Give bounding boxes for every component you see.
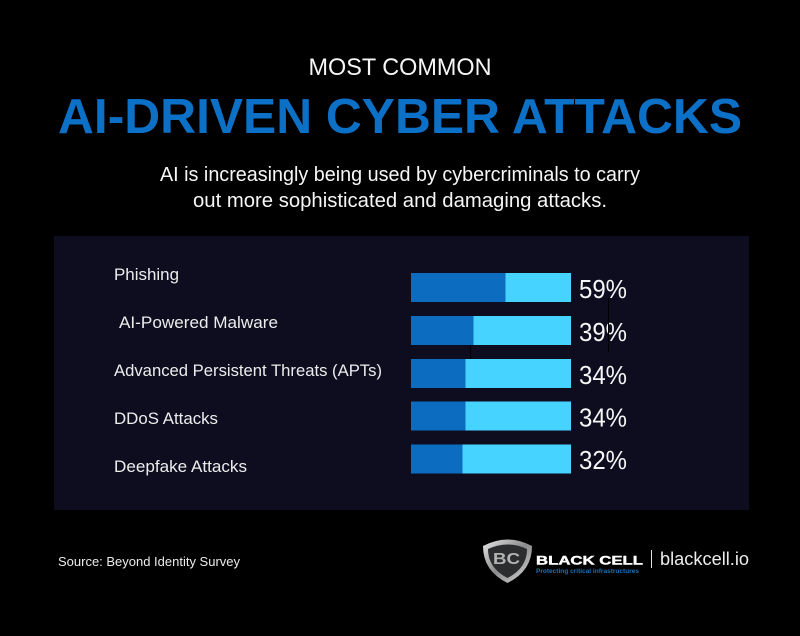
row: AI-Powered Malware: AI-Powered Malware bbox=[119, 314, 278, 332]
row: Advanced Persistent Threats: Advanced Persistent Threats (APTs) bbox=[114, 362, 382, 380]
row: AI-Powered Malware: 39% bbox=[579, 319, 627, 347]
logo: Black Cell bbox=[483, 540, 749, 583]
source note: Source: Beyond Identity Survey bbox=[58, 554, 240, 569]
intro text bbox=[160, 164, 640, 212]
logo: Black Cell: blackcell.io bbox=[660, 549, 749, 569]
row: DDoS Attacks: 34% bbox=[579, 404, 627, 432]
logo: Black Cell: Protecting critical infrastructures bbox=[536, 568, 639, 575]
row: DDoS Attacks: DDoS Attacks bbox=[114, 410, 218, 428]
row: AI-Powered Malware bbox=[119, 314, 627, 347]
icon: shield: BC bbox=[493, 551, 521, 568]
row: Phishing bbox=[114, 266, 627, 304]
row: Advanced Persistent Threats bbox=[114, 359, 627, 390]
icon: shield bbox=[483, 540, 532, 583]
subtitle: MOST COMMON bbox=[308, 54, 492, 81]
row: Deepfake Attacks: 32% bbox=[579, 447, 627, 475]
intro text: out more sophisticated and damaging attacks. bbox=[193, 190, 607, 212]
title: AI-DRIVEN CYBER ATTACKS bbox=[58, 90, 742, 144]
row: Advanced Persistent Threats: 34% bbox=[579, 362, 627, 390]
logo: Black Cell: BLACK CELL bbox=[536, 554, 643, 568]
intro text: AI is increasingly being used by cybercriminals to carry bbox=[160, 164, 640, 186]
row: Phishing: 59% bbox=[579, 276, 627, 304]
row: Deepfake Attacks: Deepfake Attacks bbox=[114, 458, 247, 476]
panel: bar chart bbox=[54, 236, 749, 510]
row: Phishing: Phishing bbox=[114, 266, 179, 284]
row: DDoS Attacks bbox=[114, 402, 627, 432]
row: Deepfake Attacks bbox=[114, 444, 627, 476]
